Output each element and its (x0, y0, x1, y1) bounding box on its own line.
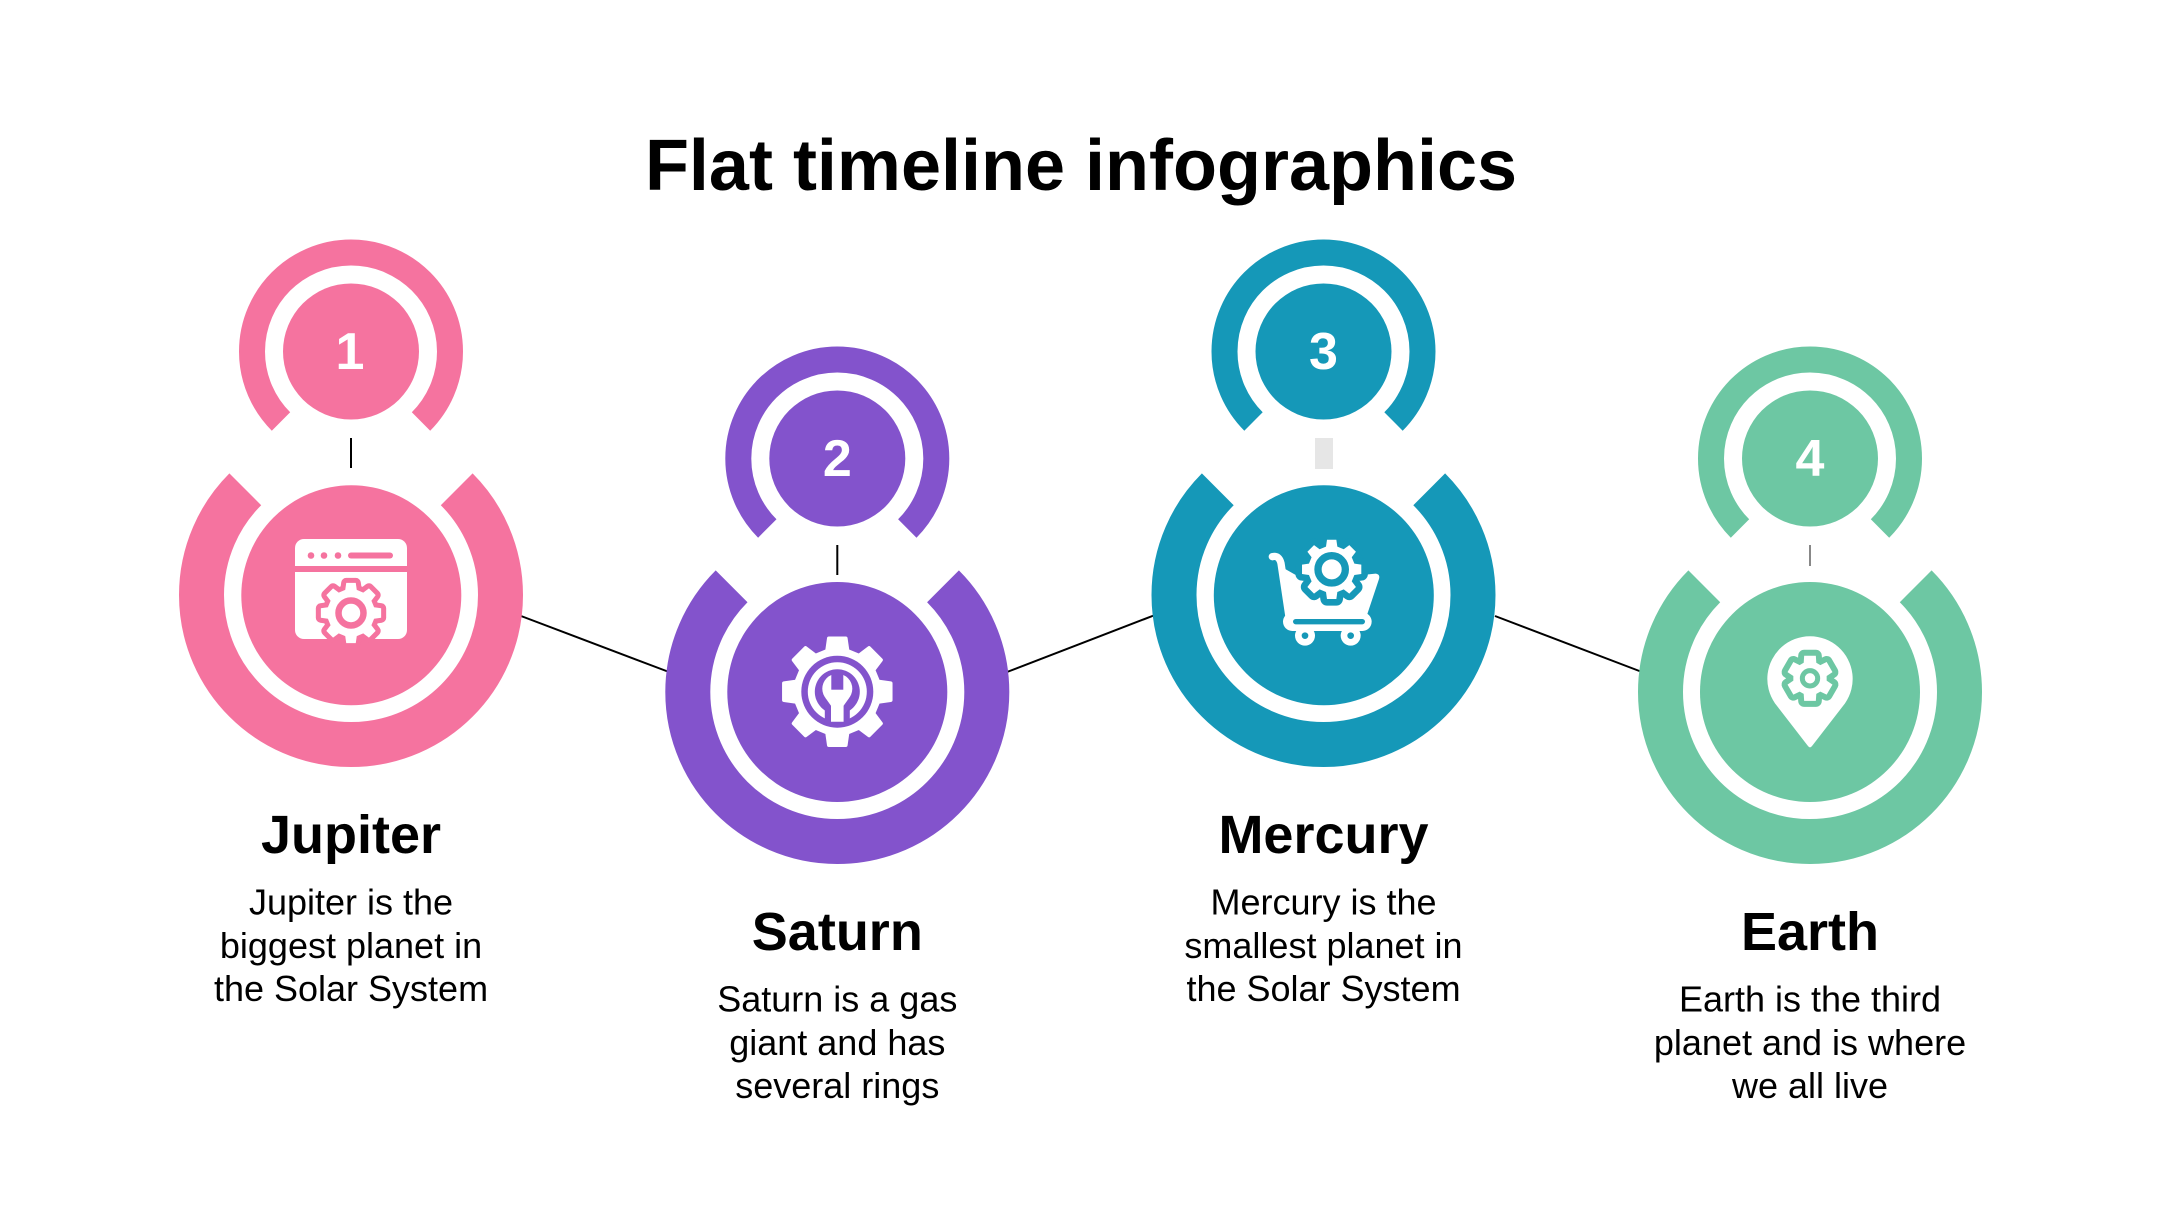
panel: step 3 Mercury (1174, 252, 1473, 1009)
number badge 2: 2 (823, 430, 852, 488)
large ring 4 (1660, 586, 1959, 842)
description Saturn: giant and has (729, 1022, 945, 1063)
connector tick 2 (836, 545, 838, 575)
large disc 1 (241, 485, 461, 705)
description Earth: planet and is where (1654, 1022, 1966, 1063)
title: Flat timeline infographics (645, 126, 1517, 206)
description Mercury: smallest planet in (1184, 925, 1463, 966)
large disc 2 (727, 582, 947, 802)
icon: browser window with gear (295, 539, 407, 643)
number badge 3 (1224, 252, 1423, 422)
number badge 1 (252, 252, 450, 422)
icon: map pin with gear (1767, 636, 1853, 747)
description Earth: Earth is the third (1679, 978, 1941, 1020)
description Jupiter: biggest planet in (220, 925, 482, 966)
panel: step 4 Earth (1654, 359, 1966, 1106)
icon: shopping cart with gear (1272, 540, 1379, 646)
description Mercury: Mercury is the (1210, 882, 1437, 922)
description Earth: we all live (1731, 1065, 1888, 1106)
large ring 2 (688, 586, 987, 842)
icon: gear with wrench (784, 638, 891, 745)
number badge 3: 3 (1309, 323, 1338, 381)
large ring 1 (202, 489, 500, 745)
connector tick 4 (1809, 545, 1811, 566)
heading Earth: Earth (1741, 902, 1879, 962)
heading Jupiter: Jupiter (261, 805, 441, 865)
large ring 3 (1174, 489, 1473, 745)
description Saturn: Saturn is a gas (717, 978, 957, 1020)
description Jupiter: Jupiter is the (249, 882, 453, 922)
description Saturn: several rings (735, 1065, 939, 1106)
connector tick 3 (1315, 438, 1333, 469)
description Mercury: the Solar System (1186, 968, 1461, 1009)
panel: step 1 Jupiter (202, 252, 500, 1009)
number badge 2 (738, 359, 936, 528)
description Jupiter: the Solar System (214, 968, 488, 1009)
large disc 3 (1214, 485, 1434, 705)
connector lines between steps (521, 615, 1642, 672)
panel: step 2 Saturn (688, 359, 987, 1106)
heading Saturn: Saturn (752, 902, 923, 962)
number badge 4 (1711, 359, 1909, 528)
number badge 4: 4 (1796, 430, 1825, 488)
number badge 1: 1 (336, 323, 364, 381)
large disc 4 (1700, 582, 1920, 802)
connector tick 1 (350, 438, 352, 468)
heading Mercury: Mercury (1218, 805, 1429, 865)
